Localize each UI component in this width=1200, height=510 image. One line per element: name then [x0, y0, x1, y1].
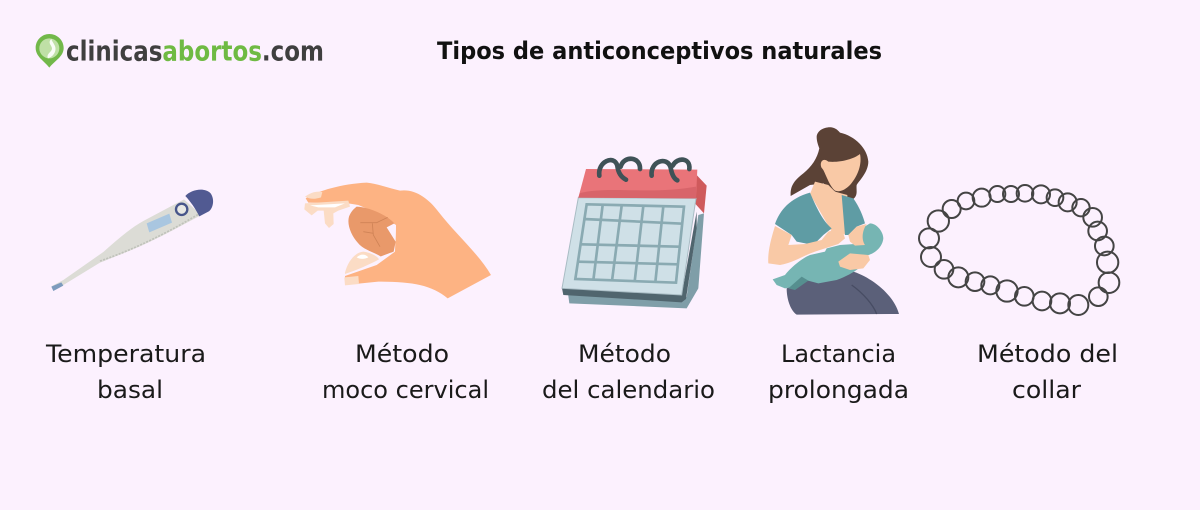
shirt [775, 193, 832, 245]
icon: bead necklace [919, 185, 1119, 315]
label: método moco cervical: moco cervical [322, 376, 489, 404]
hair [791, 127, 868, 199]
calendar rings [599, 159, 689, 180]
baby head [848, 224, 867, 246]
logo: clinicasabortos.com [36, 34, 324, 68]
back sheets [568, 213, 704, 308]
label: método del collar: Método del [977, 340, 1118, 368]
baby diaper shading [788, 277, 808, 290]
label: temperatura basal: Temperatura [45, 340, 206, 368]
label: temperatura basal: basal [97, 376, 163, 404]
icon: thermometer [51, 190, 213, 291]
label: método del calendario [542, 340, 715, 404]
face [821, 154, 861, 191]
inner finger shading [348, 207, 396, 257]
label: método moco cervical: Método [355, 340, 449, 368]
logo wordmark: clinicasabortos.com [66, 34, 324, 68]
calendar grid [575, 204, 684, 283]
icon: calendar [562, 159, 707, 308]
hand [306, 183, 491, 298]
label: método del calendario: Método [578, 340, 671, 368]
label: lactancia prolongada: prolongada [768, 376, 909, 404]
red side pages [693, 175, 707, 213]
nails and mucus [305, 192, 322, 199]
icon: hand with cervical mucus [304, 183, 491, 298]
thumb nail [345, 252, 379, 274]
arm [768, 226, 845, 265]
icon: breastfeeding mother [768, 127, 899, 315]
label: temperatura basal [45, 340, 206, 404]
calendar page [562, 198, 696, 295]
skin: neck and chest [810, 182, 847, 235]
baby body [773, 223, 883, 288]
label: método moco cervical [322, 340, 489, 404]
label: método del calendario: del calendario [542, 376, 715, 404]
label: método del collar [977, 340, 1118, 404]
red header [578, 169, 697, 198]
icon: green location pin [36, 34, 64, 68]
legs [787, 271, 899, 315]
label: método del collar: collar [1012, 376, 1081, 404]
label: lactancia prolongada: Lactancia [781, 340, 896, 368]
supporting hand [838, 253, 870, 270]
title: Tipos de anticonceptivos naturales [437, 37, 882, 65]
gap between finger and palm [387, 225, 396, 242]
label: lactancia prolongada [768, 340, 909, 404]
